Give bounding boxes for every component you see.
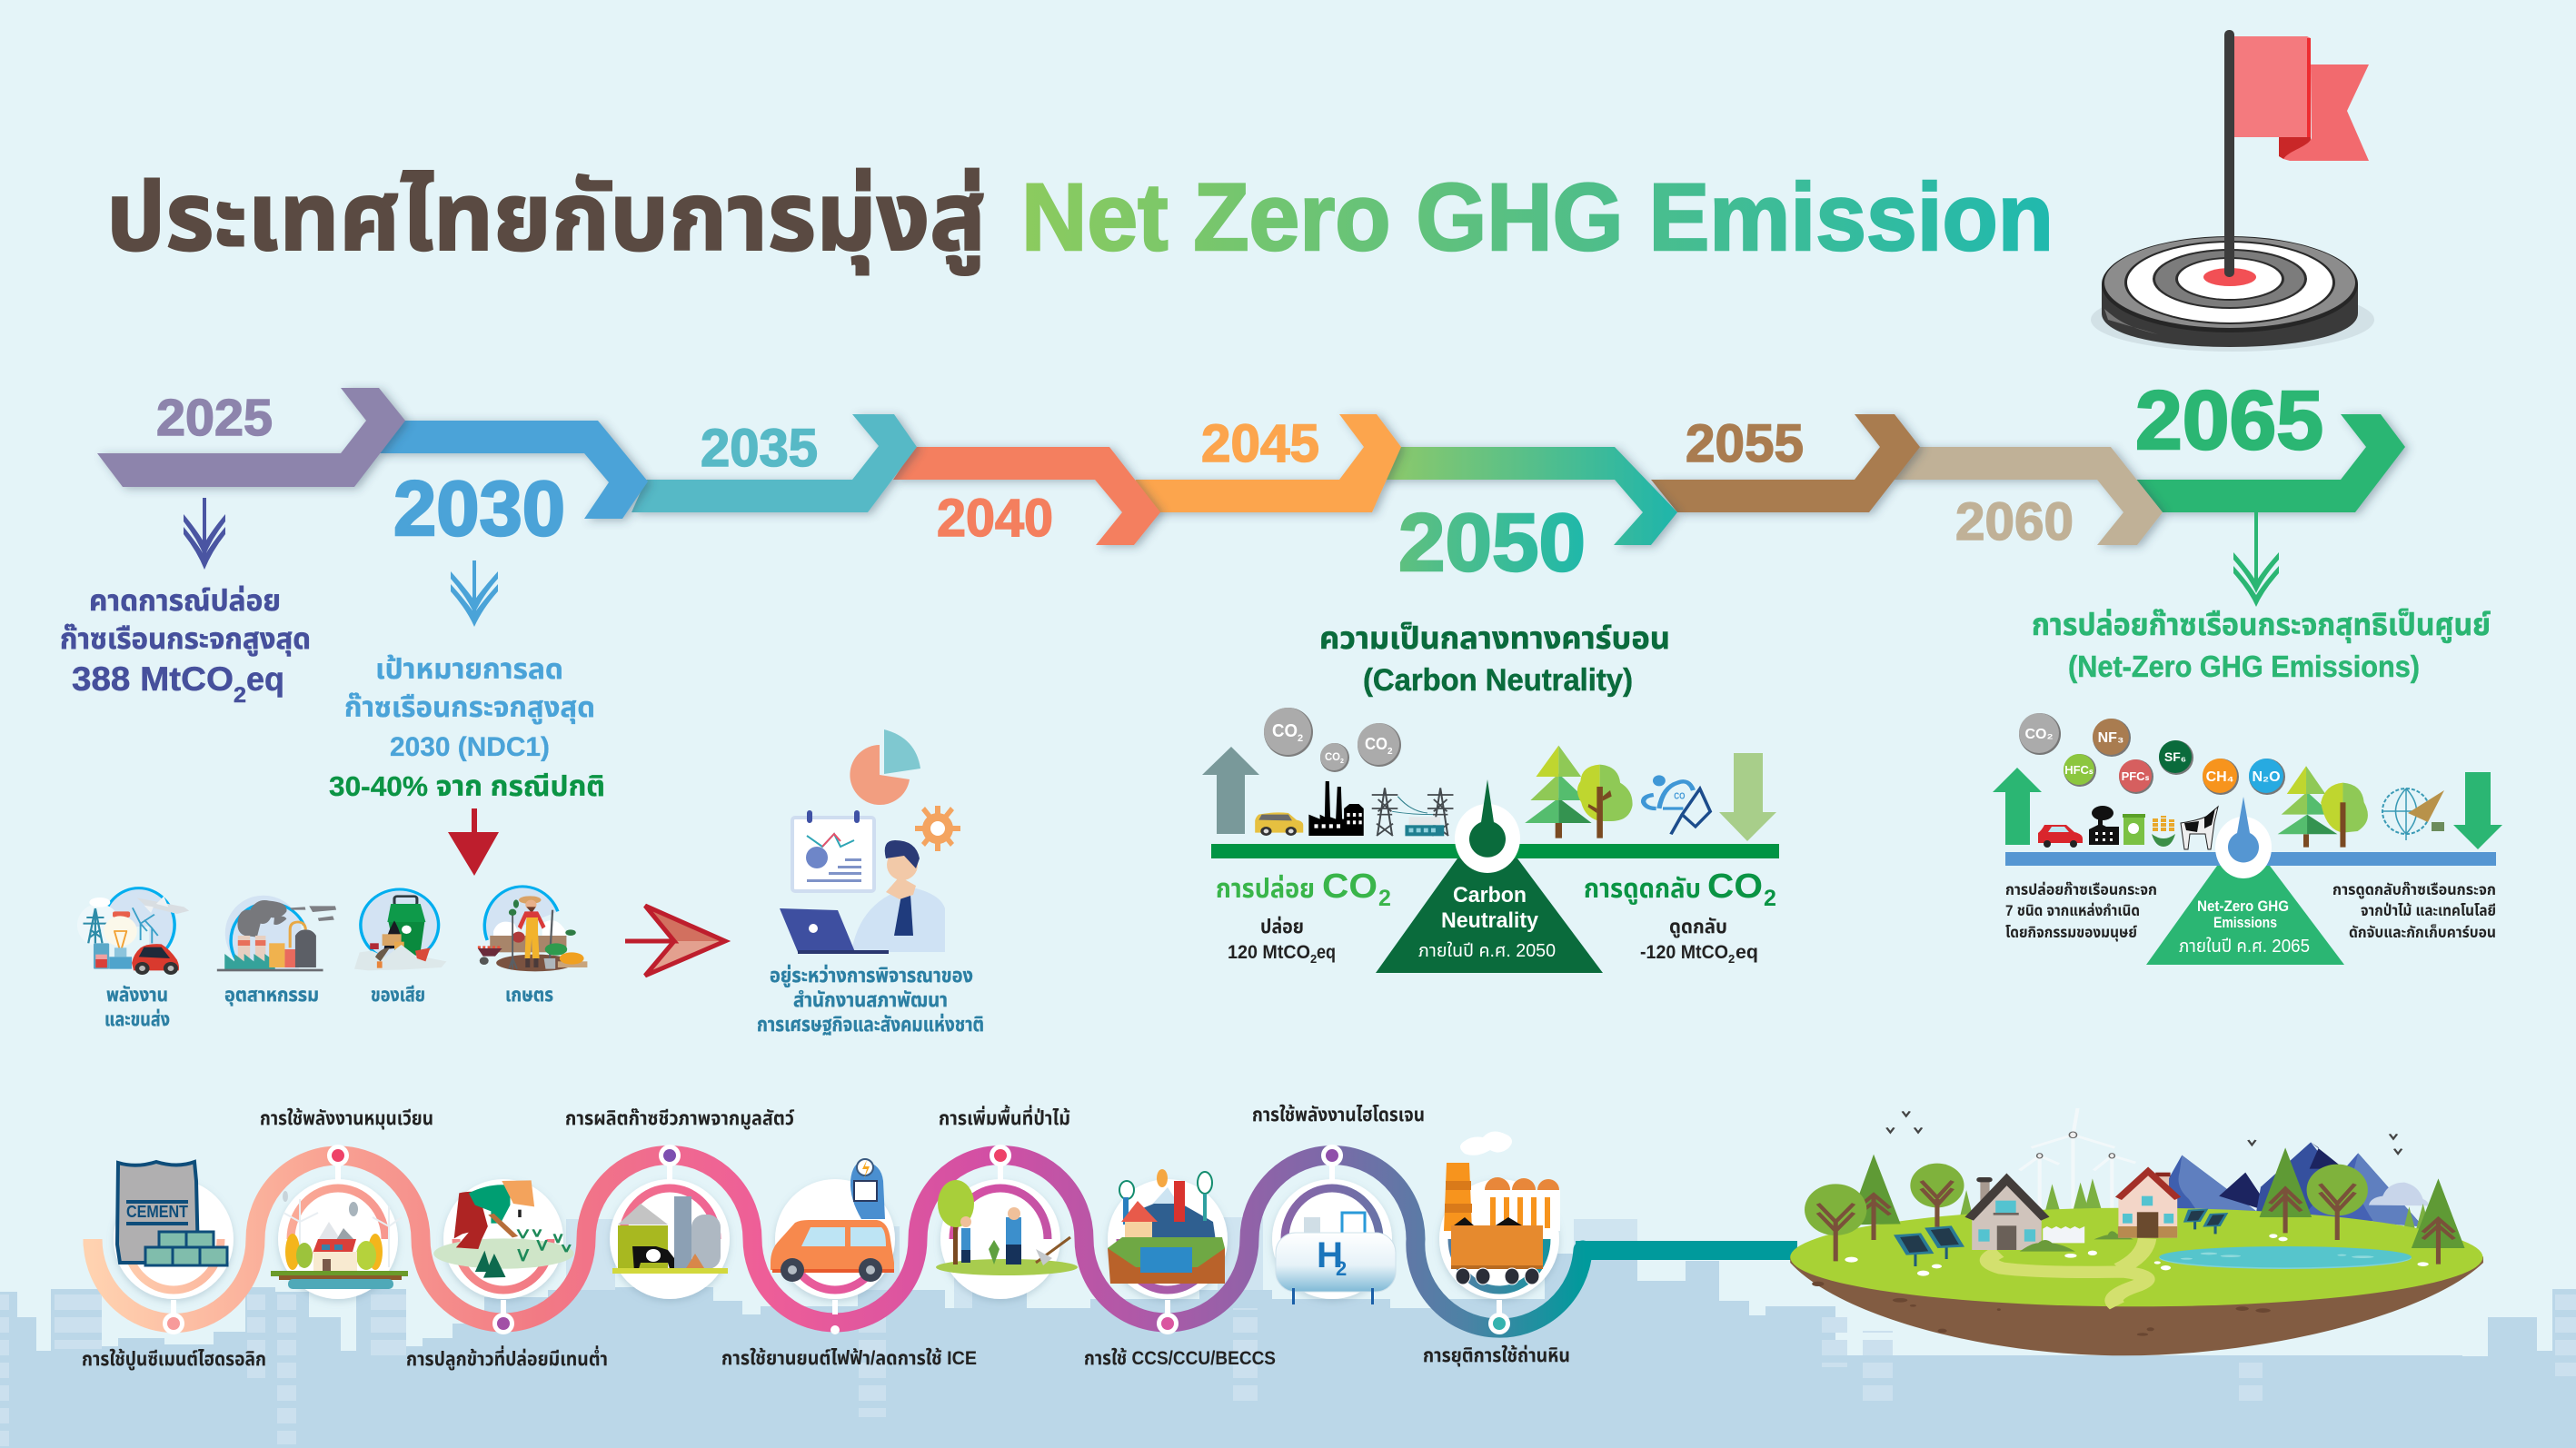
text: absorb CO2: 2 — [1728, 952, 1735, 966]
text: triangle carbon neutrality: Neutrality — [1441, 908, 1539, 933]
labels: sectors — [104, 985, 553, 1030]
arrow: net zero up — [1993, 768, 2042, 845]
labels: pathway measures: การเพิ่มพื้นที่ป่าไม้ — [939, 1105, 1070, 1129]
icon: cow — [2181, 807, 2218, 849]
right trees — [2260, 1147, 2465, 1265]
text: emit CO2: ปล่อย — [1260, 917, 1304, 937]
text: net zero absorption notes: การดูดกลับก๊าซเรือนกระจก — [2332, 880, 2496, 899]
icon: factory — [1308, 781, 1364, 836]
icon: CO2 bubbles: 2 — [1340, 759, 1344, 765]
text: 2030 target: 30-40% จาก กรณีปกติ — [329, 770, 605, 802]
text: 2025 forecast: ก๊าซเรือนกระจกสูงสุด — [60, 622, 311, 656]
house right — [2118, 1171, 2178, 1238]
text: under review by NESDC: สำนักงานสภาพัฒนา — [793, 988, 948, 1011]
labels: pathway measures: การปลูกข้าวที่ปล่อยมีเทนต่ำ — [406, 1345, 608, 1371]
seesaw: net zero — [2005, 797, 2496, 965]
text: triangle net zero — [2179, 898, 2310, 957]
labels: sectors: พลังงาน — [106, 985, 168, 1006]
cloud — [2369, 1183, 2428, 1205]
icon: renewable house — [271, 1191, 408, 1289]
text: under review by NESDC: อยู่ระหว่างการพิจารณาของ — [770, 964, 973, 987]
text: triangle carbon neutrality: Carbon — [1453, 883, 1527, 907]
timeline arrow 2040 — [893, 447, 1160, 545]
icon: greenhouse gas bubbles — [2019, 713, 2285, 795]
icon: trees — [1525, 746, 1633, 838]
text: emit CO2: 2 — [1378, 886, 1391, 911]
heading: carbon neutrality: ความเป็นกลางทางคาร์บอน — [1319, 621, 1670, 656]
text: absorb CO2 — [1584, 868, 1776, 966]
heading: carbon neutrality: (Carbon Neutrality) — [1363, 663, 1633, 698]
icon: rice farmer — [433, 1180, 574, 1278]
text: emit CO2: การปล่อย — [1216, 875, 1315, 904]
text: triangle net zero: ภายในปี ค.ศ. 2065 — [2179, 937, 2310, 957]
left trees — [1805, 1155, 1964, 1261]
text: net zero emission notes — [2005, 880, 2157, 942]
text: 2025 forecast: 388 MtCO — [72, 660, 234, 698]
icon: greenhouse gas bubbles: SF₆ — [2164, 749, 2186, 764]
icon: CO2 bubbles — [1264, 708, 1401, 772]
wind turbines — [2020, 1108, 2135, 1224]
icon: greenhouse gas bubbles: NF₃ — [2098, 730, 2123, 746]
icon: green bin — [2123, 814, 2145, 845]
year labels: 2035 — [701, 419, 818, 478]
text: net zero emission notes: การปล่อยก๊าซเรือนกระจก — [2005, 880, 2157, 898]
timeline arrow 2060 — [1890, 447, 2163, 545]
icon: agriculture — [478, 887, 587, 971]
year labels: 2065 — [2135, 374, 2323, 467]
timeline arrow 2045 — [1122, 414, 1401, 512]
icon: power pylons — [1372, 788, 1453, 836]
teal connector band — [1576, 1241, 1797, 1260]
arrow: red down — [448, 808, 499, 876]
timeline arrow 2030 — [377, 421, 648, 519]
city skyline — [0, 1208, 2576, 1448]
icon: globe with hands — [2382, 788, 2444, 840]
arrow: red outlined right — [625, 906, 725, 976]
icon: flag on target — [2091, 30, 2374, 352]
earth base — [1790, 1256, 2483, 1355]
text: absorb CO2: ดูดกลับ — [1669, 917, 1727, 938]
icon: carbon capture — [1644, 775, 1710, 834]
labels: pathway measures: การผลิตก๊าซชีวภาพจากมูลสัตว์ — [565, 1108, 794, 1130]
text: net zero emission notes: โดยกิจกรรมของมนุษย์ — [2005, 924, 2137, 942]
text: net zero absorption notes — [2332, 880, 2496, 941]
back pines — [1959, 1178, 2430, 1229]
text: emit CO2: eq — [1317, 942, 1336, 963]
icon: yellow car — [1255, 812, 1303, 836]
text: absorb CO2: CO — [1707, 868, 1763, 906]
text: triangle net zero: Emissions — [2213, 914, 2277, 931]
labels: sectors: อุตสาหกรรม — [224, 985, 319, 1007]
text: triangle net zero: Net-Zero GHG — [2197, 898, 2289, 915]
labels: sectors: เกษตร — [505, 985, 553, 1006]
title: ประเทศไทยกับการมุ่งสู่ — [106, 164, 986, 275]
icon: carbon capture: CO — [1674, 791, 1686, 801]
icon: CO2 bubbles: 2 — [1387, 747, 1393, 757]
text: triangle carbon neutrality — [1418, 883, 1556, 961]
text: under review by NESDC: การเศรษฐกิจและสังคมแห่งชาติ — [757, 1013, 984, 1036]
island: net zero world — [1790, 1108, 2483, 1355]
text: absorb CO2: 2 — [1764, 886, 1776, 911]
ribbon path — [93, 1155, 1583, 1328]
labels: pathway measures: การใช้ปูนซีเมนต์ไฮดรอลิก — [82, 1349, 266, 1371]
icon: cement bag — [117, 1162, 227, 1265]
text: 2025 forecast: คาดการณ์ปล่อย — [89, 584, 281, 617]
icon: greenhouse gas bubbles: CH₄ — [2206, 769, 2233, 785]
year labels: 2030 — [393, 466, 565, 552]
text: 2025 forecast: 2 — [234, 683, 246, 708]
birds — [1886, 1111, 2402, 1154]
arrow: 2025 down — [184, 498, 225, 570]
text: 2030 target: 2030 (NDC1) — [390, 732, 550, 762]
icon: biogas and cow — [612, 1196, 728, 1274]
footpath — [1989, 1238, 2147, 1305]
labels: pathway measures: การใช้พลังงานหมุนเวียน — [260, 1108, 433, 1130]
icon: hydrogen tank: 2 — [1336, 1257, 1347, 1280]
title: Net Zero GHG Emission — [1021, 164, 2054, 271]
text: absorb CO2: eq — [1736, 942, 1758, 963]
timeline arrow 2065 — [2136, 414, 2405, 512]
icon: greenhouse gas bubbles: PFCₛ — [2122, 769, 2150, 783]
icon: CO2 bubbles: CO — [1365, 735, 1387, 753]
text: 2030 target — [329, 653, 605, 802]
timeline arrow 2025 — [97, 388, 405, 487]
arrow: 2030 down — [451, 560, 498, 627]
icon: electric van — [771, 1159, 894, 1282]
heading: net zero — [2032, 608, 2491, 683]
timeline arrow 2055 — [1651, 414, 1920, 512]
year labels: 2060 — [1955, 492, 2074, 551]
title — [106, 164, 2054, 275]
icon: waste — [354, 889, 446, 970]
labels: pathway measures: การใช้ CCS/CCU/BECCS — [1084, 1348, 1276, 1369]
labels: pathway measures: การยุติการใช้ถ่านหิน — [1423, 1345, 1570, 1367]
icon: substation — [1405, 817, 1444, 836]
text: 2025 forecast: eq — [246, 660, 284, 698]
timeline arrow 2050 — [1377, 447, 1677, 545]
text: emit CO2 — [1216, 868, 1391, 966]
icon: greenhouse gas bubbles: HFCₛ — [2064, 763, 2094, 777]
year labels: 2050 — [1398, 498, 1586, 589]
icon: analyst at laptop — [780, 729, 960, 954]
icon: energy and transport — [77, 888, 189, 975]
white inner circles — [114, 1179, 1559, 1299]
icon: wheat — [2152, 816, 2175, 847]
text: emit CO2: 120 MtCO — [1228, 942, 1310, 963]
arrow: absorption down — [1719, 753, 1776, 841]
text: net zero absorption notes: จากป่าไม้ และเทคโนโลยี — [2361, 902, 2496, 919]
text: absorb CO2: การดูดกลับ — [1584, 875, 1701, 905]
icon: hydrogen tank: H — [1317, 1235, 1343, 1275]
mountains — [2150, 1142, 2423, 1227]
year labels: 2055 — [1686, 414, 1804, 473]
seesaw: carbon neutrality — [1211, 779, 1779, 973]
heading: carbon neutrality — [1319, 621, 1670, 698]
text: under review by NESDC — [757, 964, 984, 1036]
labels: pathway measures: การใช้พลังงานไฮโดรเจน — [1252, 1105, 1425, 1126]
arrow: net zero down — [2453, 772, 2502, 849]
text: 2025 forecast — [60, 584, 311, 708]
year labels: 2040 — [937, 489, 1053, 548]
icon: CCS geology — [1108, 1169, 1225, 1284]
inner arcs — [126, 1188, 1547, 1290]
grass surface — [1790, 1208, 2482, 1306]
text: emit CO2: 2 — [1310, 952, 1317, 966]
icon: coal wagon and plant — [1444, 1131, 1560, 1284]
icon: CO2 bubbles: CO — [1272, 721, 1298, 741]
text: emit CO2: CO — [1322, 868, 1378, 906]
icon: cement bag: CEMENT — [126, 1203, 188, 1221]
heading: net zero: (Net-Zero GHG Emissions) — [2068, 650, 2420, 683]
icon: small factory — [2089, 806, 2119, 845]
year labels — [156, 374, 2323, 589]
text: net zero absorption notes: ดักจับและกักเก็บคาร์บอน — [2349, 923, 2496, 941]
text: 2030 target: ก๊าซเรือนกระจกสูงสุด — [344, 691, 595, 724]
house left — [1969, 1177, 2045, 1250]
ribbon nodes — [163, 1145, 1510, 1334]
year labels: 2045 — [1201, 414, 1319, 473]
labels: sectors: ของเสีย — [371, 985, 425, 1006]
bushes — [2020, 1231, 2133, 1252]
labels: pathway measures: การใช้ยานยนต์ไฟฟ้า/ลดการใช้ ICE — [721, 1348, 977, 1369]
timeline arrow 2035 — [632, 414, 917, 512]
fence — [2043, 1226, 2084, 1243]
icon: greenhouse gas bubbles: CO₂ — [2024, 727, 2054, 742]
icon: trees — [2278, 766, 2368, 848]
year labels: 2025 — [156, 389, 273, 447]
icon: hydrogen tank — [1276, 1213, 1396, 1304]
icon: CO2 bubbles: 2 — [1298, 733, 1303, 744]
icon: CO2 bubbles: CO — [1325, 750, 1340, 763]
text: 2030 target: เป้าหมายการลด — [375, 653, 563, 685]
flowers — [1845, 1234, 2429, 1276]
text: net zero emission notes: 7 ชนิด จากแหล่งกำเนิด — [2005, 901, 2140, 919]
labels: pathway measures — [82, 1105, 1570, 1371]
arrow: emission up — [1202, 747, 1259, 834]
icon: industry — [217, 896, 336, 971]
text: absorb CO2: -120 MtCO — [1640, 942, 1728, 963]
solar panels — [1894, 1209, 2228, 1266]
text: triangle carbon neutrality: ภายในปี ค.ศ. 2050 — [1418, 941, 1556, 961]
pond — [2159, 1246, 2412, 1269]
icon: red car — [2038, 825, 2083, 848]
icon: greenhouse gas bubbles: N₂O — [2252, 769, 2281, 785]
arrow: 2065 down — [2233, 512, 2279, 607]
labels: sectors: และขนส่ง — [104, 1009, 170, 1030]
heading: net zero: การปล่อยก๊าซเรือนกระจกสุทธิเป็นศูนย์ — [2032, 608, 2491, 643]
icon: reforestation — [936, 1180, 1078, 1275]
